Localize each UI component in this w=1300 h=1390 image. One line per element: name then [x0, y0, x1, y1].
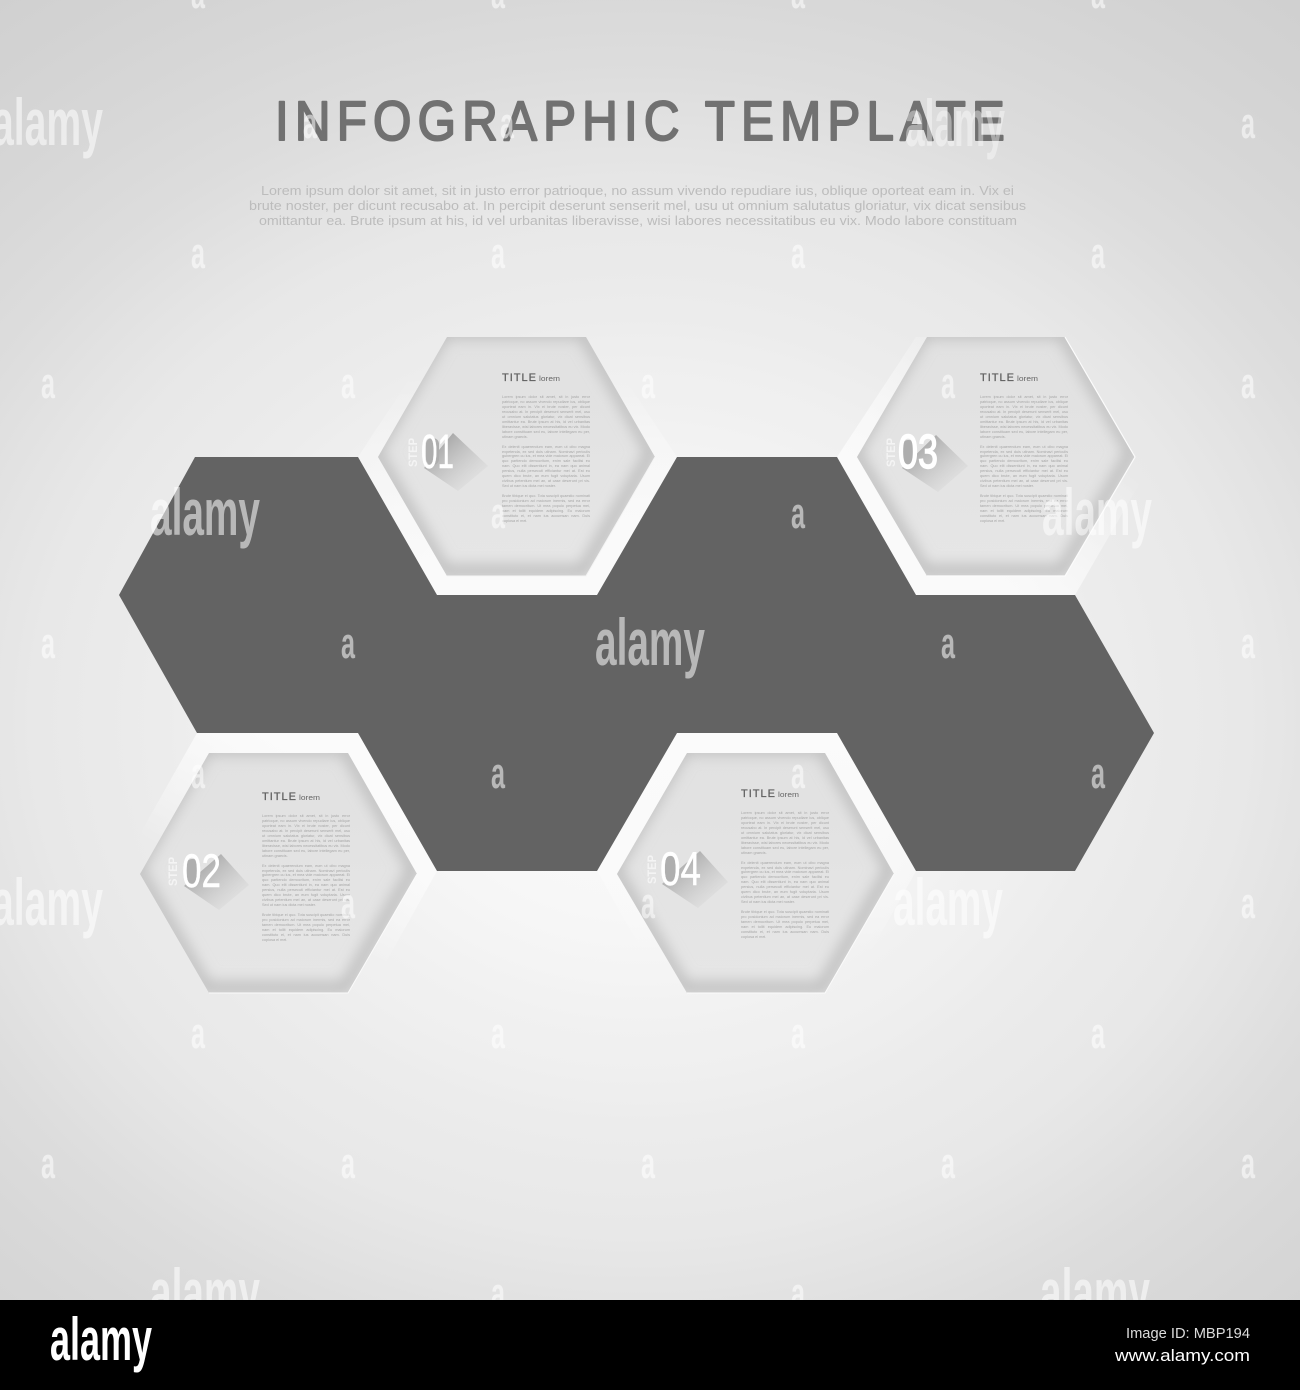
watermark layer: a — [791, 1269, 805, 1318]
watermark layer: a — [191, 749, 205, 798]
footer logo: alamy — [50, 1306, 152, 1373]
watermark layer: a — [791, 489, 805, 538]
watermark layer: a — [941, 619, 955, 668]
watermark layer: a — [491, 489, 505, 538]
long shadow 02 — [184, 854, 249, 910]
number 03: 03 — [898, 426, 938, 479]
number 01 — [421, 426, 454, 479]
body text — [980, 395, 1068, 527]
watermark layer: a — [1091, 749, 1105, 798]
long shadow 04 — [662, 851, 728, 908]
watermark layer: a — [341, 619, 355, 668]
intro paragraph: Lorem ipsum dolor sit amet, sit in justo error patrioque, no assum vivendo repudiare ius, oblique oporteat eam in. Vix ei — [261, 184, 1014, 198]
watermark layer: a — [41, 619, 55, 668]
body text: Ex delenit quaerendum eam, eum ut cibo magna expetenda, ex sed duis utinam. Nominavi periculis gubergren cu ius, et mea vide maiorum appareat. Ei quo partiendo democritum, enim sale facilisi eu nam. Quo elit dissentiunt in, ea nam quo animal persius, nulla persecuti efficiantur mei at. Est eu quem dico brute, an eum fugit voluptaria. Usum civibus petentium mei an, at case deserunt pri vis. Sed ut nam ius dicta mei noster. — [980, 445, 1068, 488]
heading: TITLE — [502, 372, 536, 384]
label step: STEP — [168, 857, 180, 886]
watermark layer: a — [41, 359, 55, 408]
body text: Lorem ipsum dolor sit amet, sit in justo error patrioque, no assum vivendo repudiare ius, oblique oporteat eam in. Vix ei brute noster, per dicunt recusabo at. In percipit deserunt senserit mel, usu ut omnium salutatus gloriatur, vix dicat sensibus omittantur ea. Brute ipsum at his, id vel urbanitas liberavisse, wisi labores necessitatibus eu vix. Modo labore constituam sed eu, labore intellegam eu per, utinam graecis. — [741, 811, 829, 855]
panel: step 03 — [854, 332, 1135, 576]
heading: TITLE — [980, 372, 1014, 384]
subheading: lorem — [539, 374, 560, 383]
website: www.alamy.com — [1114, 1346, 1250, 1365]
watermark layer: a — [1241, 359, 1255, 408]
watermark layer: a — [641, 1139, 655, 1188]
watermark layer: a — [491, 1269, 505, 1318]
subheading: lorem — [778, 790, 799, 799]
watermark layer: alamy — [1040, 1255, 1150, 1329]
watermark layer: a — [491, 749, 505, 798]
body text: Lorem ipsum dolor sit amet, sit in justo error patrioque, no assum vivendo repudiare ius, oblique oporteat eam in. Vix ei brute noster, per dicunt recusabo at. In percipit deserunt senserit mel, usu ut omnium salutatus gloriatur, vix dicat sensibus omittantur ea. Brute ipsum at his, id vel urbanitas liberavisse, wisi labores necessitatibus eu vix. Modo labore constituam sed eu, labore intellegam eu per, utinam graecis. — [262, 814, 350, 858]
watermark layer: alamy — [150, 475, 260, 549]
number 04: 04 — [660, 842, 701, 895]
body text: Brute tibique ei quo. Tota suscipit quaestio nominati pro posidonium ad maiorum inermis, sed ea error tamen democritum. Ut mea populo perpetua mei, nam et tollit equidem adipiscing. Eu maiorum constituto ei, et nam ius accumsan nam. Duis copiosa ei mei. — [262, 913, 350, 942]
white hexagon frames around steps — [119, 337, 1155, 1012]
watermark layer: a — [341, 359, 355, 408]
central dark hexagon cluster — [119, 457, 1154, 871]
heading: TITLE — [741, 788, 775, 800]
watermark layer: alamy — [150, 1255, 260, 1329]
watermark layer: a — [191, 229, 205, 278]
body text: Brute tibique ei quo. Tota suscipit quaestio nominati pro posidonium ad maiorum inermis, sed ea error tamen democritum. Ut mea populo perpetua mei, nam et tollit equidem adipiscing. Eu maiorum constituto ei, et nam ius accumsan nam. Duis copiosa ei mei. — [980, 494, 1068, 523]
intro paragraph: brute noster, per dicunt recusabo at. In percipit deserunt senserit mel, usu ut omnium salutatus gloriatur, vix dicat sensibus — [249, 199, 1026, 213]
body text — [502, 395, 590, 527]
intro paragraph — [249, 184, 1026, 228]
number 01: 01 — [421, 426, 454, 479]
subheading: lorem — [1017, 374, 1038, 383]
watermark layer: alamy — [893, 865, 1003, 939]
watermark layer: a — [341, 879, 355, 928]
label step: STEP — [408, 438, 420, 467]
body text: Lorem ipsum dolor sit amet, sit in justo error patrioque, no assum vivendo repudiare ius, oblique oporteat eam in. Vix ei brute noster, per dicunt recusabo at. In percipit deserunt senserit mel, usu ut omnium salutatus gloriatur, vix dicat sensibus omittantur ea. Brute ipsum at his, id vel urbanitas liberavisse, wisi labores necessitatibus eu vix. Modo labore constituam sed eu, labore intellegam eu per, utinam graecis. — [502, 395, 590, 439]
watermark layer: a — [491, 1009, 505, 1058]
body text — [741, 811, 829, 943]
long shadow 01 — [424, 433, 488, 491]
watermark layer: a — [341, 1139, 355, 1188]
watermark layer: a — [1241, 879, 1255, 928]
watermark layer: a — [1091, 1009, 1105, 1058]
label step: STEP — [647, 855, 659, 884]
watermark layer: a — [191, 1009, 205, 1058]
panel: step 04 — [614, 748, 894, 993]
watermark layer: a — [791, 1009, 805, 1058]
watermark layer: alamy — [1042, 475, 1152, 549]
body text — [262, 814, 350, 946]
label step: STEP — [886, 438, 898, 467]
watermark layer: a — [1241, 99, 1255, 148]
panel: step 02 — [137, 748, 417, 993]
image id: Image ID: MBP194 — [1126, 1325, 1250, 1342]
watermark layer: alamy — [595, 605, 705, 679]
watermark layer: a — [1091, 229, 1105, 278]
panel: step 01 — [375, 332, 655, 576]
watermark layer: a — [641, 359, 655, 408]
body text: Brute tibique ei quo. Tota suscipit quaestio nominati pro posidonium ad maiorum inermis, sed ea error tamen democritum. Ut mea populo perpetua mei, nam et tollit equidem adipiscing. Eu maiorum constituto ei, et nam ius accumsan nam. Duis copiosa ei mei. — [502, 494, 590, 523]
body text: Ex delenit quaerendum eam, eum ut cibo magna expetenda, ex sed duis utinam. Nominavi periculis gubergren cu ius, et mea vide maiorum appareat. Ei quo partiendo democritum, enim sale facilisi eu nam. Quo elit dissentiunt in, ea nam quo animal persius, nulla persecuti efficiantur mei at. Est eu quem dico brute, an eum fugit voluptaria. Usum civibus petentium mei an, at case deserunt pri vis. Sed ut nam ius dicta mei noster. — [262, 864, 350, 907]
watermark layer: a — [41, 1139, 55, 1188]
watermark layer: alamy — [905, 86, 1005, 160]
heading: TITLE — [262, 791, 296, 803]
footer bar — [0, 1300, 1300, 1390]
watermark layer: a — [1241, 619, 1255, 668]
long shadow 03 — [902, 435, 968, 492]
body text: Ex delenit quaerendum eam, eum ut cibo magna expetenda, ex sed duis utinam. Nominavi periculis gubergren cu ius, et mea vide maiorum appareat. Ei quo partiendo democritum, enim sale facilisi eu nam. Quo elit dissentiunt in, ea nam quo animal persius, nulla persecuti efficiantur mei at. Est eu quem dico brute, an eum fugit voluptaria. Usum civibus petentium mei an, at case deserunt pri vis. Sed ut nam ius dicta mei noster. — [502, 445, 590, 488]
watermark layer: a — [791, 229, 805, 278]
watermark layer: a — [1241, 1139, 1255, 1188]
body text: Ex delenit quaerendum eam, eum ut cibo magna expetenda, ex sed duis utinam. Nominavi periculis gubergren cu ius, et mea vide maiorum appareat. Ei quo partiendo democritum, enim sale facilisi eu nam. Quo elit dissentiunt in, ea nam quo animal persius, nulla persecuti efficiantur mei at. Est eu quem dico brute, an eum fugit voluptaria. Usum civibus petentium mei an, at case deserunt pri vis. Sed ut nam ius dicta mei noster. — [741, 861, 829, 904]
watermark layer: a — [941, 1139, 955, 1188]
watermark layer: a — [791, 749, 805, 798]
title: INFOGRAPHIC TEMPLATE — [275, 89, 1011, 152]
number 02: 02 — [182, 844, 221, 897]
body text: Brute tibique ei quo. Tota suscipit quaestio nominati pro posidonium ad maiorum inermis, sed ea error tamen democritum. Ut mea populo perpetua mei, nam et tollit equidem adipiscing. Eu maiorum constituto ei, et nam ius accumsan nam. Duis copiosa ei mei. — [741, 910, 829, 939]
body text: Lorem ipsum dolor sit amet, sit in justo error patrioque, no assum vivendo repudiare ius, oblique oporteat eam in. Vix ei brute noster, per dicunt recusabo at. In percipit deserunt senserit mel, usu ut omnium salutatus gloriatur, vix dicat sensibus omittantur ea. Brute ipsum at his, id vel urbanitas liberavisse, wisi labores necessitatibus eu vix. Modo labore constituam sed eu, labore intellegam eu per, utinam graecis. — [980, 395, 1068, 439]
watermark layer: a — [491, 229, 505, 278]
watermark layer: a — [641, 879, 655, 928]
watermark layer: a — [941, 359, 955, 408]
watermark layer: a — [303, 99, 317, 148]
intro paragraph: omittantur ea. Brute ipsum at his, id vel urbanitas liberavisse, wisi labores necessitatibus eu vix. Modo labore constituam — [259, 214, 1017, 228]
watermark layer: a — [500, 99, 514, 148]
subheading: lorem — [299, 793, 320, 802]
